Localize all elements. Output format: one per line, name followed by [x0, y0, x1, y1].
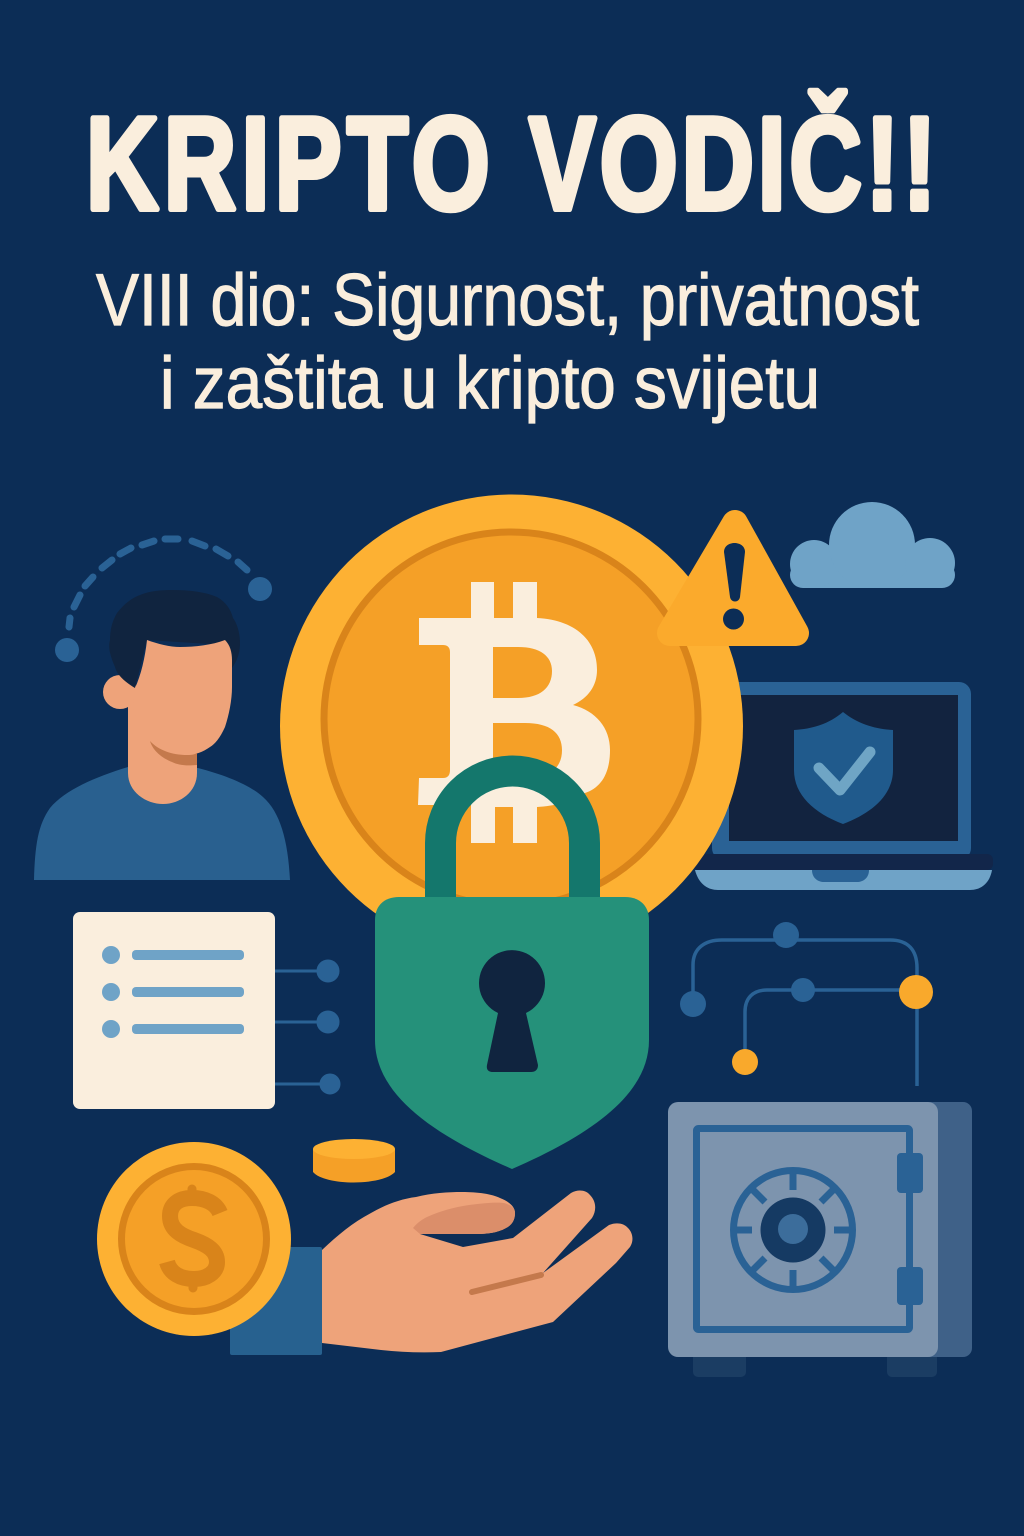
dashed arc [69, 539, 247, 627]
dial [734, 1170, 852, 1290]
subtitle: VIII dio: Sigurnost, privatnost [96, 260, 919, 341]
icon: shield [794, 712, 893, 824]
icon: laptop with shield [693, 682, 993, 890]
icon: padlock shield [375, 771, 649, 1169]
icon: safe [668, 1102, 972, 1377]
title: VODIČ!! [529, 90, 940, 237]
icon: bitcoin coin [280, 494, 743, 958]
keyhole [479, 950, 545, 1072]
subtitle: i zaštita u kripto svijetu [160, 343, 820, 424]
icon: circuit network [680, 922, 933, 1086]
subtitle [96, 260, 919, 424]
title: KRIPTO [86, 90, 495, 237]
hair [109, 590, 240, 688]
icon: person [34, 539, 290, 880]
icon: cloud [790, 502, 955, 588]
icon: check mark [819, 752, 870, 790]
icon: warning triangle [670, 523, 796, 633]
bitcoin symbol [418, 582, 610, 843]
icon: dollar coin [97, 1142, 322, 1355]
icon: small coin [313, 1139, 395, 1182]
dollar symbol [167, 1189, 220, 1288]
title [86, 90, 940, 237]
icon: hand [322, 1191, 632, 1352]
icon: checklist document [73, 912, 339, 1109]
